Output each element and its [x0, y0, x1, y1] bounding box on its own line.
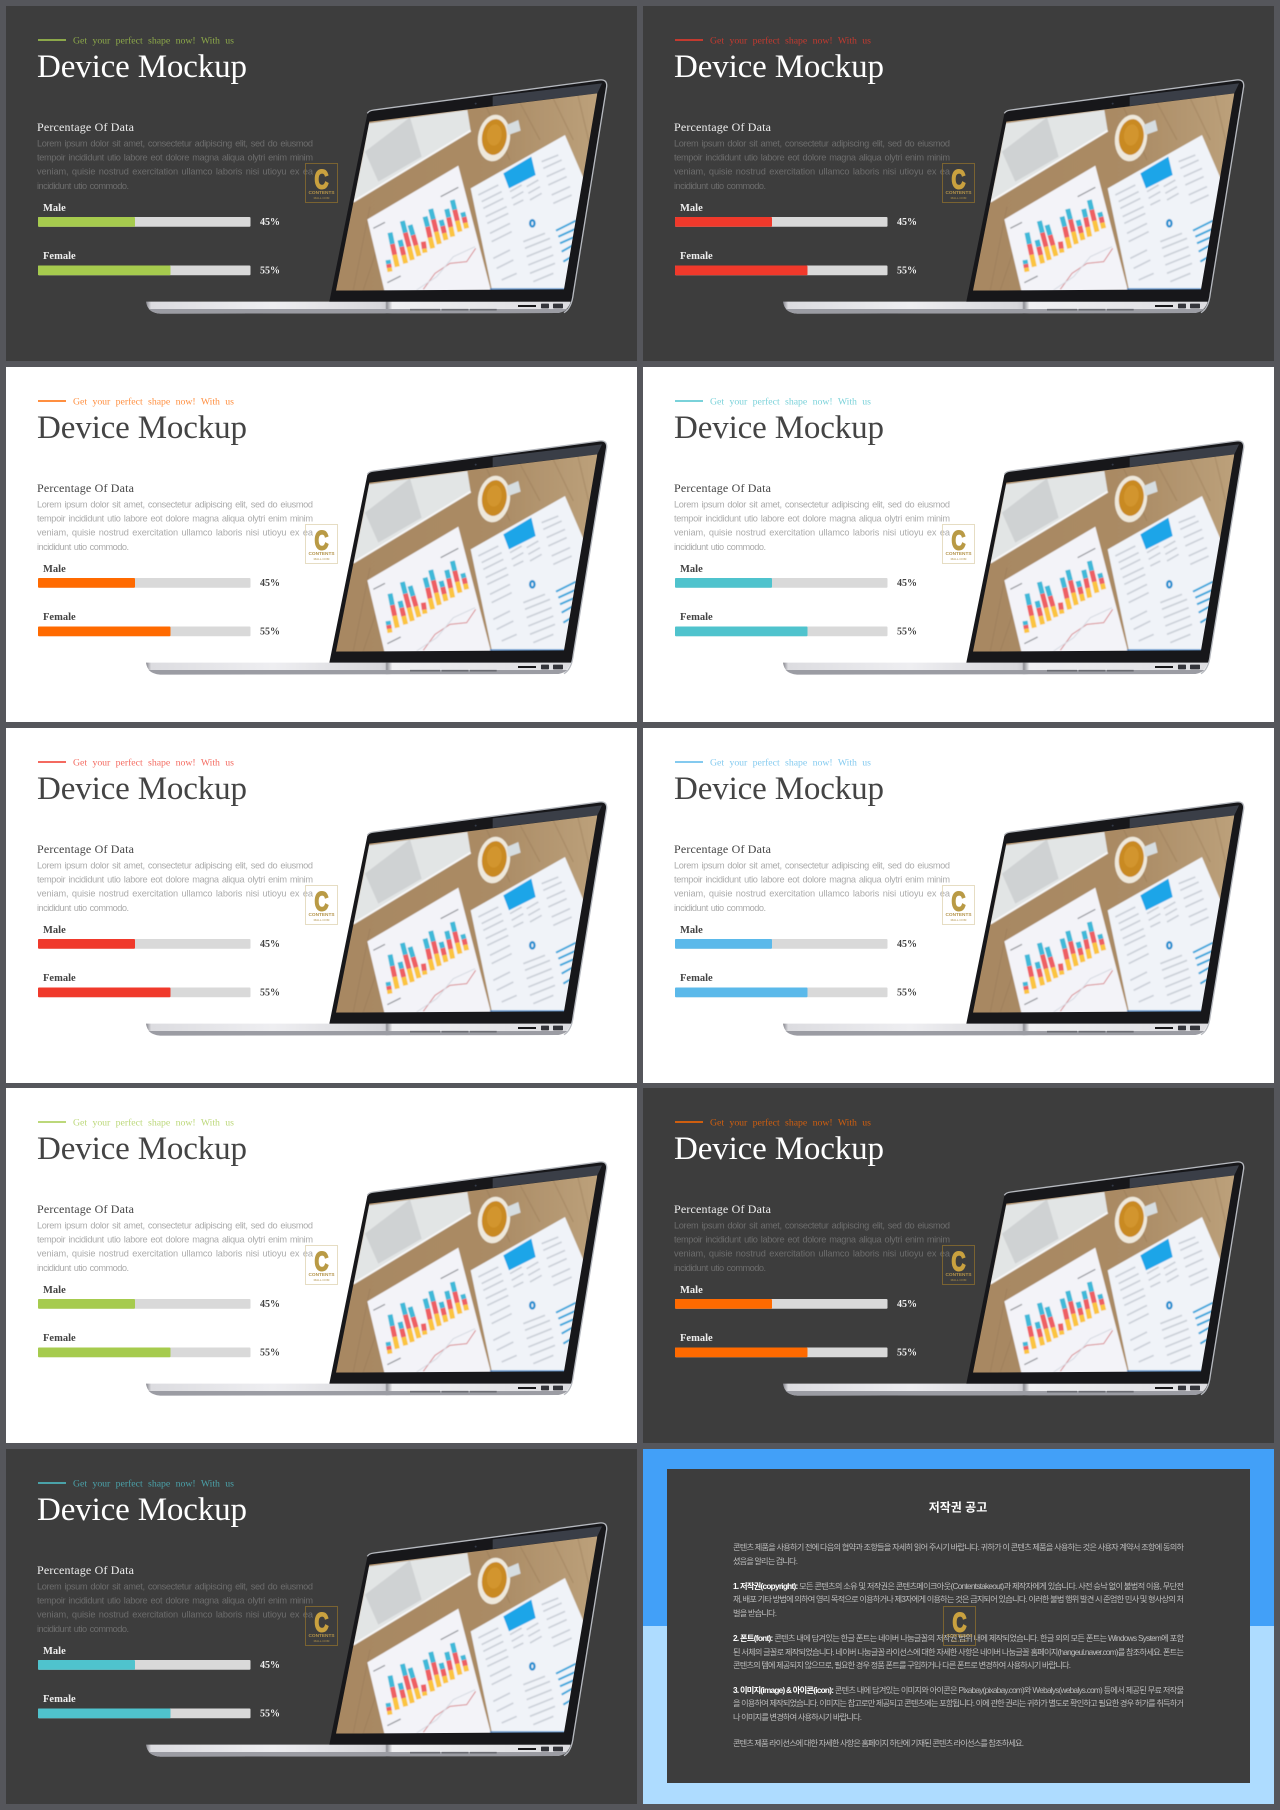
title: Device Mockup: [674, 771, 884, 807]
bar: female 55%: [675, 251, 917, 276]
text block: percentage of data: incididunt utio commodo.: [37, 903, 129, 913]
watermark badge: MALL.COM: [951, 557, 967, 561]
panel: light slide, teal accent: [643, 367, 1274, 722]
laptop mockup: [783, 1162, 1244, 1396]
watermark badge: C: [314, 164, 328, 194]
notice: image and icon: 을 이용하여 제작되었습니다. 이미지는 참고로만 제공되고 콘텐츠에는 포함됩니다. 이에 관한 권리는 귀하가 별도로 확인하고 필요한 경우 허가를 취득하거: [733, 1698, 1184, 1708]
bar: female 55%: [38, 1694, 280, 1720]
text block: percentage of data: [37, 1563, 314, 1634]
title: Device Mockup: [37, 1131, 247, 1167]
bar: female 55%: [38, 251, 280, 276]
panel: dark slide, orange accent: [643, 1088, 1274, 1442]
bar: female 55%: 55%: [260, 266, 280, 276]
text block: percentage of data: [674, 842, 951, 913]
bar: female 55%: Female: [43, 612, 76, 623]
notice box: [667, 1469, 1250, 1783]
text block: percentage of data: Percentage Of Data: [674, 1202, 772, 1216]
bar: male 45%: [675, 1285, 917, 1310]
text block: percentage of data: Lorem ipsum dolor sit amet, consectetur adipiscing elit, sed do eiusmod: [674, 860, 950, 870]
bar: male 45%: Male: [680, 203, 703, 214]
bar: female 55%: Female: [43, 251, 76, 262]
laptop mockup: [146, 1162, 607, 1396]
watermark badge: [944, 1606, 976, 1646]
bar: female 55%: [675, 1333, 917, 1358]
watermark badge: CONTENTS: [946, 1633, 972, 1638]
bar: male 45%: Male: [43, 1646, 66, 1657]
text block: percentage of data: Percentage Of Data: [37, 481, 135, 495]
text block: percentage of data: [674, 1202, 951, 1273]
bar: male 45%: 45%: [260, 1660, 280, 1671]
watermark badge: [306, 524, 338, 564]
bar: female 55%: 55%: [897, 1348, 917, 1358]
watermark badge: MALL.COM: [314, 557, 330, 561]
bar: male 45%: [675, 925, 917, 950]
laptop mockup: [146, 80, 607, 314]
text block: percentage of data: incididunt utio commodo.: [674, 1263, 766, 1273]
text block: percentage of data: Lorem ipsum dolor sit amet, consectetur adipiscing elit, sed do eiusmod: [674, 1220, 950, 1230]
text block: percentage of data: Percentage Of Data: [37, 120, 135, 134]
watermark badge: [942, 886, 974, 924]
bar: female 55%: [38, 612, 280, 638]
watermark badge: CONTENTS: [308, 551, 334, 556]
text block: percentage of data: Lorem ipsum dolor sit amet, consectetur adipiscing elit, sed do eiusmod: [674, 138, 950, 148]
notice: copyright: [733, 1581, 1184, 1618]
bar: female 55%: Female: [43, 973, 76, 984]
notice: font: 콘텐츠의 템에 제공되지 않으므로, 필요한 경우 정품 폰트를 구입하거나 다른 폰트로 변경하여 사용하시기 바랍니다.: [733, 1660, 1071, 1670]
watermark badge: CONTENTS: [946, 551, 972, 556]
bar: male 45%: [38, 564, 280, 589]
bar: male 45%: [38, 925, 280, 950]
notice: font: 된 서체의 글꼴로 제작되었습니다. 네이버 나눔글꼴 라이선스에 대한 자세한 사항은 네이버 나눔글꼴 홈페이지(hangeul.naver.com)를 참조하세요. 폰트는: [733, 1647, 1184, 1657]
bar: female 55%: [38, 973, 280, 998]
bar: female 55%: 55%: [897, 988, 917, 998]
watermark badge: MALL.COM: [314, 918, 330, 922]
text block: percentage of data: tempoir incididunt utio labore eot dolore magna aliqua olytri enim minim: [674, 152, 950, 162]
notice: copyright: 1. 저작권(copyright): 모든 콘텐츠의 소유 및 저작권은 콘텐츠메이크아웃(Contentstakeout)과 제작자에게 있습니다. 사전 승낙 없이 불법적 이용, 무단전: [733, 1581, 1184, 1591]
bar: male 45%: [38, 1646, 280, 1671]
text block: percentage of data: Percentage Of Data: [37, 842, 135, 856]
title: Device Mockup: [37, 1492, 247, 1528]
laptop mockup: [783, 80, 1244, 314]
bar: female 55%: Female: [680, 612, 713, 623]
bar: male 45%: [675, 203, 917, 228]
watermark badge: MALL.COM: [951, 196, 967, 200]
watermark badge: [942, 524, 974, 564]
watermark badge: [306, 886, 338, 924]
tagline: Get your perfect shape now! With us: [73, 1478, 234, 1490]
panel: dark slide, green accent: [6, 6, 637, 360]
panel: light slide, green accent: [6, 1088, 637, 1442]
text block: percentage of data: incididunt utio commodo.: [37, 542, 129, 552]
bar: female 55%: 55%: [897, 266, 917, 276]
text block: percentage of data: tempoir incididunt utio labore eot dolore magna aliqua olytri enim minim: [37, 514, 313, 524]
watermark badge: [942, 164, 974, 202]
bar: male 45%: [38, 1285, 280, 1310]
bar: female 55%: 55%: [260, 1348, 280, 1358]
notice intro: 셨음을 알리는 겁니다.: [733, 1556, 798, 1566]
text block: percentage of data: incididunt utio commodo.: [674, 903, 766, 913]
watermark badge: MALL.COM: [314, 1278, 330, 1282]
text block: percentage of data: incididunt utio commodo.: [37, 1624, 129, 1634]
text block: percentage of data: veniam, quisie nostrud exercitation ullamco laboris nisi utioyu ex ea: [37, 1610, 314, 1620]
watermark badge: [306, 1246, 338, 1284]
title: Device Mockup: [37, 771, 247, 807]
text block: percentage of data: tempoir incididunt utio labore eot dolore magna aliqua olytri enim minim: [37, 1596, 313, 1606]
notice heading: 저작권 공고: [929, 1500, 987, 1514]
bar: male 45%: Male: [43, 1285, 66, 1296]
text block: percentage of data: [37, 842, 314, 913]
watermark badge: CONTENTS: [308, 190, 334, 195]
tagline: Get your perfect shape now! With us: [710, 36, 871, 46]
text block: percentage of data: [37, 481, 314, 552]
tagline: Get your perfect shape now! With us: [73, 36, 234, 46]
watermark badge: CONTENTS: [946, 912, 972, 917]
text block: percentage of data: Percentage Of Data: [674, 842, 772, 856]
tagline: Get your perfect shape now! With us: [710, 396, 871, 408]
watermark badge: CONTENTS: [308, 912, 334, 917]
tagline: Get your perfect shape now! With us: [710, 758, 871, 768]
watermark badge: C: [952, 164, 966, 194]
watermark badge: CONTENTS: [308, 1633, 334, 1638]
notice: image and icon: 나 이미지를 변경하여 사용하시기 바랍니다.: [733, 1712, 862, 1722]
bar: female 55%: 55%: [260, 988, 280, 998]
panel: light slide, red accent: [6, 728, 637, 1082]
panel: dark slide, teal accent: [6, 1449, 637, 1804]
watermark badge: C: [314, 1608, 328, 1638]
watermark badge: MALL.COM: [951, 918, 967, 922]
text block: percentage of data: [37, 1202, 314, 1273]
text block: percentage of data: tempoir incididunt utio labore eot dolore magna aliqua olytri enim minim: [37, 1234, 313, 1244]
notice closing line: 콘텐츠 제품 라이선스에 대한 자세한 사항은 홈페이지 하단에 기재된 콘텐츠 라이선스를 참조하세요.: [733, 1738, 1024, 1748]
text block: percentage of data: tempoir incididunt utio labore eot dolore magna aliqua olytri enim minim: [674, 1234, 950, 1244]
text block: percentage of data: tempoir incididunt utio labore eot dolore magna aliqua olytri enim minim: [37, 874, 313, 884]
watermark badge: C: [952, 1246, 966, 1276]
watermark badge: MALL.COM: [314, 1639, 330, 1643]
text block: percentage of data: [674, 120, 951, 191]
notice: copyright: 재, 배포 기타 방법에 의하여 영리 목적으로 이용하거나 제3자에게 이용하는 것은 금지되어 있습니다. 이러한 불법 행위 발견 시 준엄한 민사 및 형사상의 처: [733, 1594, 1184, 1604]
notice: image and icon: [733, 1685, 1184, 1722]
bar: male 45%: Male: [680, 564, 703, 575]
watermark badge: [306, 1606, 338, 1646]
laptop mockup: [146, 802, 607, 1036]
watermark badge: C: [314, 526, 328, 556]
panel: light slide, orange accent: [6, 367, 637, 722]
title: Device Mockup: [674, 410, 884, 446]
laptop mockup: [146, 441, 607, 675]
watermark badge: MALL.COM: [314, 196, 330, 200]
text block: percentage of data: tempoir incididunt utio labore eot dolore magna aliqua olytri enim minim: [674, 514, 950, 524]
notice intro: 콘텐츠 제품을 사용하기 전에 다음의 협약과 조항들을 자세히 읽어 주시기 바랍니다. 귀하가 이 콘텐츠 제품을 사용하는 것은 사용자 계약서 조항에 동의하: [733, 1542, 1184, 1552]
title: Device Mockup: [37, 49, 247, 85]
bar: female 55%: Female: [43, 1333, 76, 1344]
text block: percentage of data: tempoir incididunt utio labore eot dolore magna aliqua olytri enim minim: [674, 874, 950, 884]
watermark badge: [306, 164, 338, 202]
text block: percentage of data: Lorem ipsum dolor sit amet, consectetur adipiscing elit, sed do eiusmod: [37, 860, 313, 870]
watermark badge: C: [952, 526, 966, 556]
panel: light slide, blue accent: [643, 728, 1274, 1082]
watermark badge: C: [952, 1608, 966, 1638]
title: Device Mockup: [674, 1131, 884, 1167]
bar: male 45%: [675, 564, 917, 589]
text block: percentage of data: Lorem ipsum dolor sit amet, consectetur adipiscing elit, sed do eiusmod: [37, 1220, 313, 1230]
notice: font: 2. 폰트(font): 콘텐츠 내에 담겨있는 한글 폰트는 네이버 나눔글꼴의 저작권 범위 내에 제작되었습니다. 한글 외의 모든 폰트는 Windows System에 포함: [733, 1633, 1184, 1643]
bar: female 55%: Female: [43, 1694, 76, 1705]
laptop mockup: [146, 1523, 607, 1757]
bar: female 55%: Female: [680, 973, 713, 984]
tagline: Get your perfect shape now! With us: [73, 1118, 234, 1128]
bar: male 45%: [38, 203, 280, 228]
text block: percentage of data: incididunt utio commodo.: [674, 542, 766, 552]
bar: female 55%: Female: [680, 1333, 713, 1344]
watermark badge: [942, 1246, 974, 1284]
bar: male 45%: 45%: [897, 217, 917, 228]
laptop mockup: [783, 802, 1244, 1036]
bar: male 45%: 45%: [897, 578, 917, 589]
bar: male 45%: 45%: [897, 939, 917, 950]
notice: font: [733, 1633, 1184, 1670]
text block: percentage of data: veniam, quisie nostrud exercitation ullamco laboris nisi utioyu ex ea: [37, 166, 314, 176]
bar: male 45%: Male: [43, 564, 66, 575]
watermark badge: C: [314, 1246, 328, 1276]
bar: male 45%: Male: [680, 925, 703, 936]
text block: percentage of data: Lorem ipsum dolor sit amet, consectetur adipiscing elit, sed do eiusmod: [37, 500, 313, 510]
text block: percentage of data: Percentage Of Data: [674, 120, 772, 134]
bar: male 45%: Male: [43, 203, 66, 214]
text block: percentage of data: veniam, quisie nostrud exercitation ullamco laboris nisi utioyu ex ea: [674, 888, 951, 898]
title: Device Mockup: [674, 49, 884, 85]
bar: female 55%: [675, 973, 917, 998]
text block: percentage of data: Lorem ipsum dolor sit amet, consectetur adipiscing elit, sed do eiusmod: [37, 138, 313, 148]
bar: male 45%: 45%: [260, 217, 280, 228]
text block: percentage of data: Percentage Of Data: [674, 481, 772, 495]
title: Device Mockup: [37, 410, 247, 446]
text block: percentage of data: veniam, quisie nostrud exercitation ullamco laboris nisi utioyu ex ea: [674, 1248, 951, 1258]
bar: female 55%: 55%: [260, 626, 280, 638]
watermark badge: CONTENTS: [308, 1272, 334, 1277]
watermark badge: MALL.COM: [952, 1639, 968, 1643]
text block: percentage of data: incididunt utio commodo.: [37, 1263, 129, 1273]
notice intro: [733, 1542, 1184, 1566]
text block: percentage of data: veniam, quisie nostrud exercitation ullamco laboris nisi utioyu ex ea: [37, 528, 314, 538]
bar: female 55%: 55%: [897, 626, 917, 638]
watermark badge: C: [952, 886, 966, 916]
panel: dark slide, red accent: [643, 6, 1274, 360]
text block: percentage of data: veniam, quisie nostrud exercitation ullamco laboris nisi utioyu ex ea: [37, 888, 314, 898]
text block: percentage of data: [674, 481, 951, 552]
tagline: Get your perfect shape now! With us: [73, 758, 234, 768]
text block: percentage of data: incididunt utio commodo.: [37, 181, 129, 191]
notice: copyright: 벌을 받습니다.: [733, 1608, 777, 1618]
bar: male 45%: 45%: [260, 578, 280, 589]
panel: copyright notice: [643, 1449, 1274, 1804]
bar: male 45%: 45%: [260, 939, 280, 950]
text block: percentage of data: veniam, quisie nostrud exercitation ullamco laboris nisi utioyu ex ea: [674, 528, 951, 538]
watermark badge: CONTENTS: [946, 190, 972, 195]
bar: male 45%: 45%: [260, 1299, 280, 1310]
text block: percentage of data: tempoir incididunt utio labore eot dolore magna aliqua olytri enim minim: [37, 152, 313, 162]
laptop mockup: [783, 441, 1244, 675]
tagline: Get your perfect shape now! With us: [710, 1118, 871, 1128]
bar: male 45%: Male: [43, 925, 66, 936]
bar: female 55%: [675, 612, 917, 638]
watermark badge: MALL.COM: [951, 1278, 967, 1282]
text block: percentage of data: Percentage Of Data: [37, 1202, 135, 1216]
text block: percentage of data: veniam, quisie nostrud exercitation ullamco laboris nisi utioyu ex ea: [674, 166, 951, 176]
text block: percentage of data: incididunt utio commodo.: [674, 181, 766, 191]
watermark badge: C: [314, 886, 328, 916]
text block: percentage of data: [37, 120, 314, 191]
text block: percentage of data: Percentage Of Data: [37, 1563, 135, 1577]
text block: percentage of data: Lorem ipsum dolor sit amet, consectetur adipiscing elit, sed do eiusmod: [37, 1582, 313, 1592]
text block: percentage of data: Lorem ipsum dolor sit amet, consectetur adipiscing elit, sed do eiusmod: [674, 500, 950, 510]
bar: female 55%: 55%: [260, 1708, 280, 1720]
bar: male 45%: 45%: [897, 1299, 917, 1310]
tagline: Get your perfect shape now! With us: [73, 396, 234, 408]
text block: percentage of data: veniam, quisie nostrud exercitation ullamco laboris nisi utioyu ex ea: [37, 1248, 314, 1258]
notice: image and icon: 3. 이미지(image) & 아이콘(icon): 콘텐츠 내에 담겨있는 이미지와 아이콘은 Pixabay(pixabay.com)와 Webalys(webalys.com) 등에서 제공된 무료 저작물: [733, 1685, 1184, 1695]
watermark badge: CONTENTS: [946, 1272, 972, 1277]
bar: female 55%: [38, 1333, 280, 1358]
bar: female 55%: Female: [680, 251, 713, 262]
bar: male 45%: Male: [680, 1285, 703, 1296]
